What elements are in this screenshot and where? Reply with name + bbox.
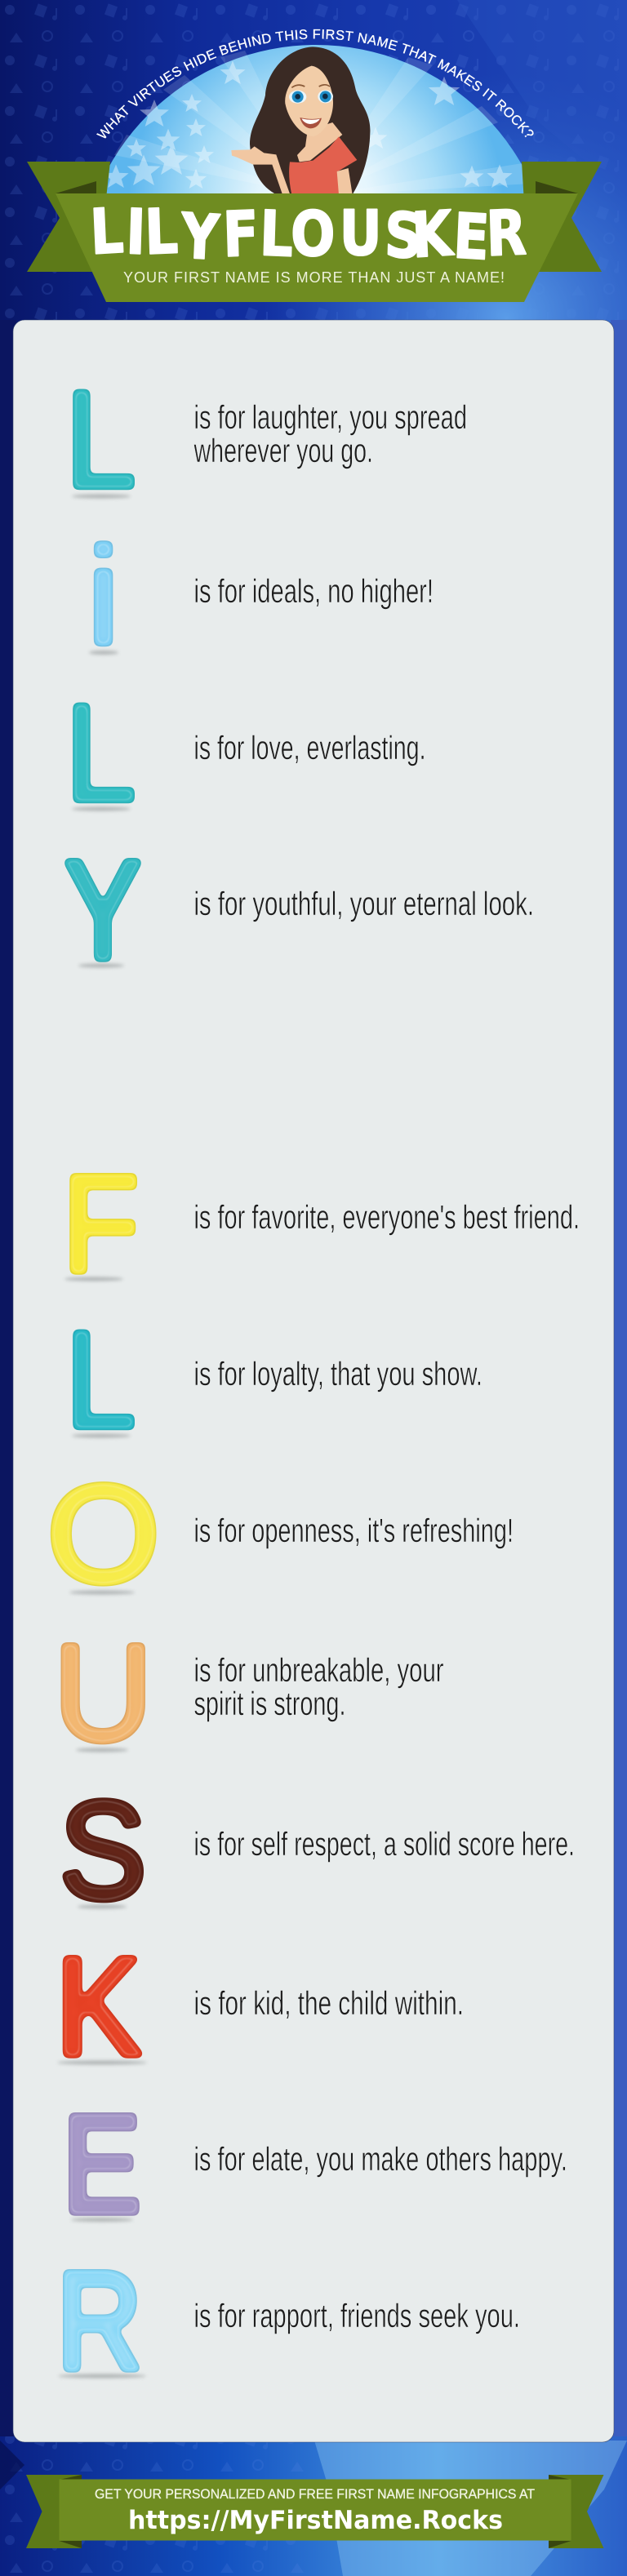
shirt — [289, 136, 357, 194]
row: F favorite: F — [62, 1148, 139, 1301]
icon: cartoon woman — [231, 47, 370, 194]
row: F favorite — [62, 1148, 580, 1301]
background: footer — [0, 2436, 627, 2576]
mouth — [300, 118, 322, 128]
panel: letters — [13, 320, 614, 2442]
row: Y youthful — [65, 833, 534, 987]
face — [285, 66, 333, 136]
row: L loyalty — [65, 1304, 482, 1457]
row: L laughter — [65, 363, 467, 517]
row: S self respect — [60, 1773, 575, 1927]
background: header — [0, 0, 627, 326]
footer ribbon — [26, 2475, 604, 2548]
row: O openness — [47, 1457, 514, 1611]
row: U unbreakable: spirit is strong. — [194, 1685, 346, 1722]
row: E elate: E — [63, 2088, 141, 2241]
row: R rapport: R — [57, 2245, 142, 2398]
eyes — [289, 85, 333, 104]
row: E elate — [63, 2088, 567, 2241]
neck — [297, 122, 342, 162]
back ribbon tails — [27, 162, 602, 272]
hair — [250, 47, 370, 194]
row: R rapport — [57, 2245, 520, 2398]
main ribbon — [56, 193, 578, 302]
subtitle: YOUR FIRST NAME IS MORE THAN JUST A NAME! — [123, 269, 505, 286]
arm and hand — [231, 146, 290, 194]
row: i ideals: is for ideals, no higher! — [194, 572, 434, 610]
row: U unbreakable — [53, 1615, 443, 1770]
row: i ideals — [87, 518, 434, 673]
row: U unbreakable: U — [53, 1615, 153, 1770]
row: L loyalty: L — [65, 1304, 136, 1457]
row: L laughter: L — [65, 363, 136, 517]
row: S self respect: S — [60, 1773, 146, 1927]
row: L loyalty: is for loyalty, that you show. — [194, 1355, 482, 1392]
row: L love — [65, 677, 426, 830]
row: K kid: is for kid, the child within. — [194, 1984, 464, 2022]
row: L laughter: wherever you go. — [193, 432, 373, 469]
row: U unbreakable: is for unbreakable, your — [194, 1651, 444, 1689]
row: L love: is for love, everlasting. — [194, 729, 426, 766]
row: K kid: K — [56, 1930, 140, 2084]
sunburst semicircle — [106, 45, 524, 193]
footer line 1: GET YOUR PERSONALIZED AND FREE FIRST NAME INFOGRAPHICS AT — [95, 2486, 535, 2502]
row: L love: L — [65, 677, 136, 830]
row: K kid — [56, 1930, 464, 2084]
footer url: https://MyFirstName.Rocks — [128, 2506, 503, 2535]
row: O openness: O — [47, 1457, 159, 1611]
row: i ideals: i — [87, 518, 119, 673]
curved heading: WHAT VIRTUES HIDE BEHIND THIS FIRST NAME THAT MAKES IT ROCK? — [96, 29, 534, 139]
row: L laughter: is for laughter, you spread — [194, 398, 467, 436]
row: Y youthful: Y — [65, 833, 140, 987]
